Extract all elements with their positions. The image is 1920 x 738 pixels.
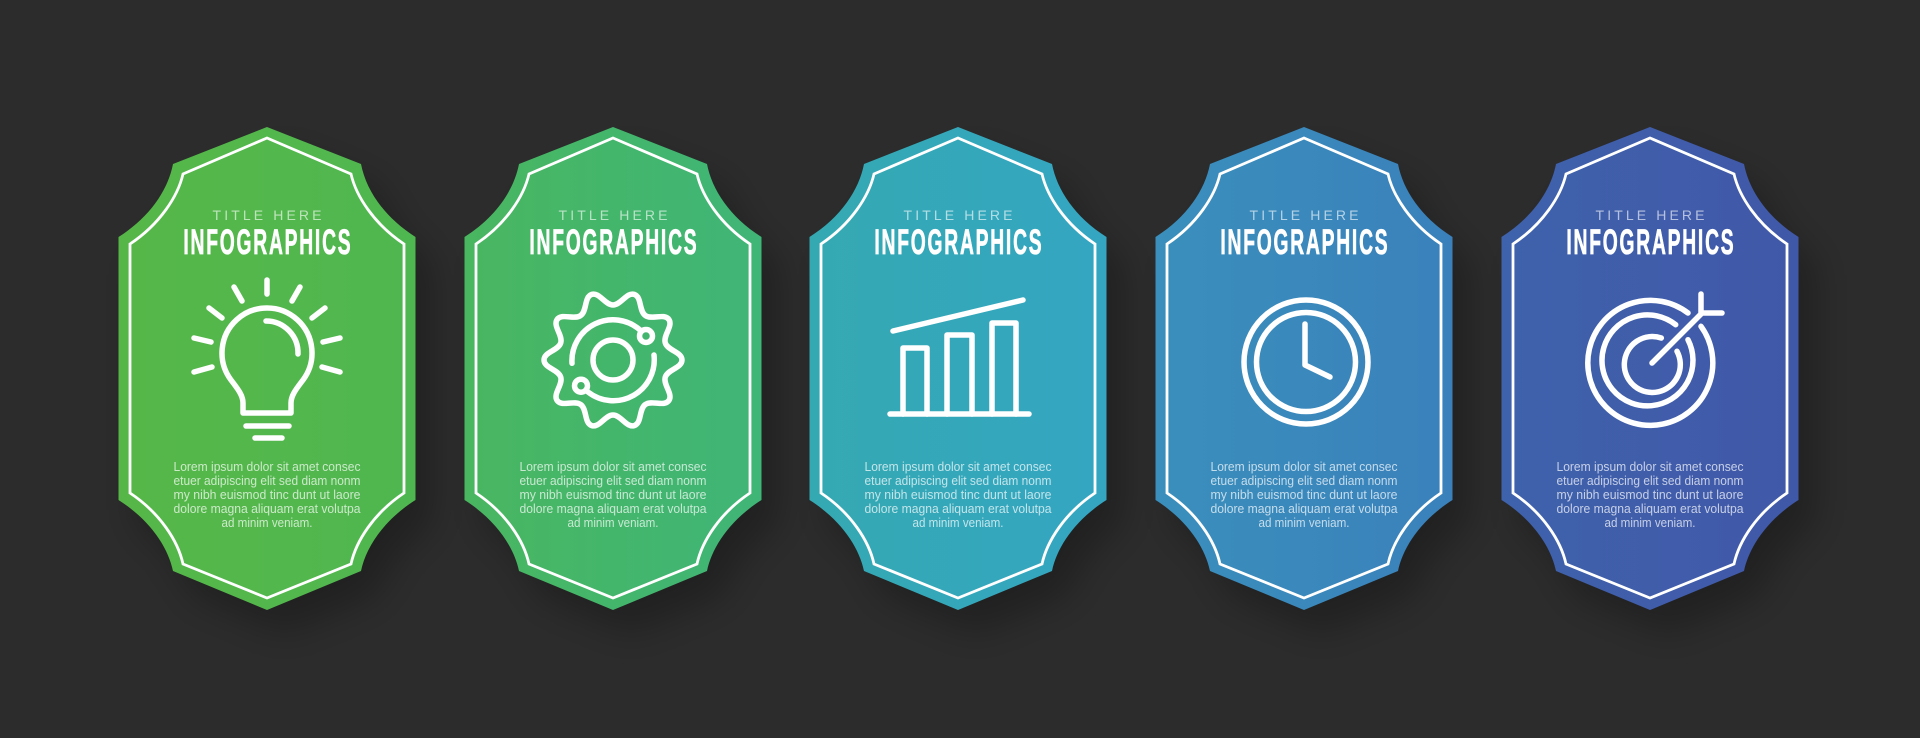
body text: ad minim veniam.: [222, 516, 312, 530]
body text: ad minim veniam.: [1258, 516, 1350, 530]
icon: light bulb: [194, 280, 340, 438]
subtitle: TITLE HERE: [558, 207, 668, 223]
body text: etuer adipiscing elit sed diam nonm: [174, 474, 360, 488]
subtitle: TITLE HERE: [904, 207, 1012, 223]
body text: ad minim veniam.: [568, 516, 658, 530]
body text: Lorem ipsum dolor sit amet consec: [1210, 460, 1398, 474]
body text: etuer adipiscing elit sed diam nonm: [864, 474, 1052, 488]
body text: my nibh euismod tinc dunt ut laore: [520, 488, 707, 502]
heading: INFOGRAPHICS: [1220, 222, 1388, 261]
body text: etuer adipiscing elit sed diam nonm: [520, 474, 706, 488]
panel: card 4 blue: [1156, 127, 1470, 634]
heading: INFOGRAPHICS: [874, 222, 1042, 261]
heading: INFOGRAPHICS: [1566, 222, 1734, 261]
icon: target with arrow: [1588, 294, 1722, 425]
subtitle: TITLE HERE: [212, 207, 322, 223]
body text: dolore magna aliquam erat volutpa: [1210, 502, 1398, 516]
body text: Lorem ipsum dolor sit amet consec: [174, 460, 360, 474]
body text: Lorem ipsum dolor sit amet consec: [520, 460, 706, 474]
body text: dolore magna aliquam erat volutpa: [1556, 502, 1744, 516]
icon: gear with orbits: [544, 294, 682, 426]
body text: [174, 460, 361, 530]
subtitle: TITLE HERE: [1250, 207, 1358, 223]
body text: my nibh euismod tinc dunt ut laore: [174, 488, 361, 502]
panel: card 2 emerald: [464, 127, 780, 634]
body text: [520, 460, 707, 530]
heading: INFOGRAPHICS: [529, 222, 697, 261]
panel: card 3 teal: [810, 127, 1124, 634]
body text: dolore magna aliquam erat volutpa: [520, 502, 707, 516]
body text: etuer adipiscing elit sed diam nonm: [1210, 474, 1398, 488]
body text: [864, 460, 1052, 530]
body text: ad minim veniam.: [912, 516, 1004, 530]
body text: Lorem ipsum dolor sit amet consec: [1556, 460, 1744, 474]
body text: [1556, 460, 1744, 530]
icon: clock: [1244, 300, 1368, 424]
body text: ad minim veniam.: [1604, 516, 1696, 530]
subtitle: TITLE HERE: [1596, 207, 1704, 223]
heading: INFOGRAPHICS: [183, 222, 351, 261]
body text: my nibh euismod tinc dunt ut laore: [1556, 488, 1744, 502]
icon: bar chart: [890, 300, 1029, 414]
body text: dolore magna aliquam erat volutpa: [174, 502, 361, 516]
panel: card 1 green: [118, 127, 434, 634]
body text: my nibh euismod tinc dunt ut laore: [864, 488, 1052, 502]
body text: my nibh euismod tinc dunt ut laore: [1210, 488, 1398, 502]
body text: [1210, 460, 1398, 530]
body text: dolore magna aliquam erat volutpa: [864, 502, 1052, 516]
panel: card 5 indigo: [1502, 127, 1816, 634]
body text: Lorem ipsum dolor sit amet consec: [864, 460, 1052, 474]
body text: etuer adipiscing elit sed diam nonm: [1556, 474, 1744, 488]
